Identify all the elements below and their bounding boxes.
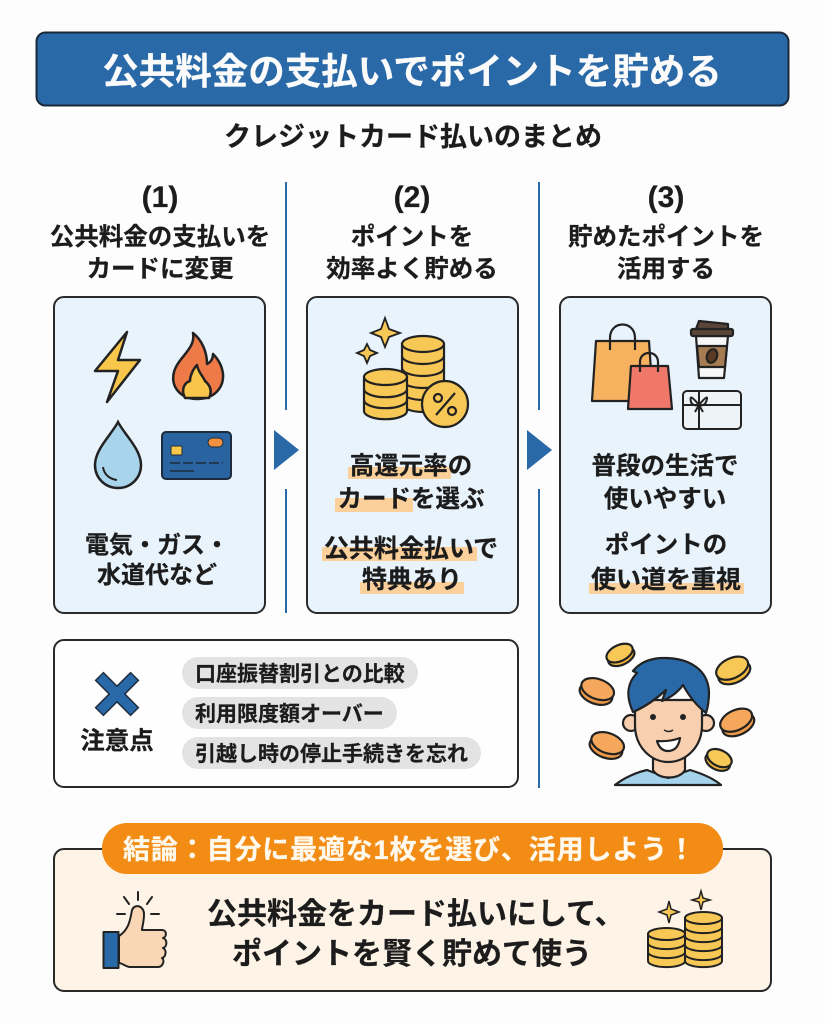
text: choose card: カードを選ぶ [338,485,484,513]
illustration: happy person with coins [577,640,758,785]
text: benefits: 特典あり [362,566,462,594]
heading: step 3: 活用する [617,255,715,283]
text: bills [85,532,229,589]
coin [587,728,627,763]
shirt [615,770,721,785]
heading: step 1: 公共料金の支払いを [50,223,270,251]
conclusion heading pill: 結論：自分に最適な1枚を選び、活用しよう！ [123,835,695,865]
text: bills: 水道代など [97,562,217,589]
icon: credit card [162,432,231,479]
coin [713,652,754,689]
panel: cautions [54,640,518,787]
hair [628,658,709,713]
panel: conclusion [54,823,771,991]
icon: coffee cup [691,321,733,378]
heading: step 1: (1) [142,181,178,214]
icon: water drop [95,422,141,488]
panel: use points [560,297,771,613]
text: bills: 電気・ガス・ [85,532,229,559]
panel: utility bills [54,297,265,613]
arrow 1 [274,430,299,470]
icon: lightning bolt [95,332,140,402]
text: conclusion message: 公共料金をカード払いにして、 [207,898,625,931]
heading: step 3: 貯めたポイントを [568,223,764,251]
mouth [657,738,680,751]
caution 2 [182,697,397,729]
panel: earn points [307,297,518,613]
text: easy to use: 普段の生活で [592,452,738,480]
text: how to spend [591,531,741,594]
heading: step 2: ポイントを [351,223,473,251]
caution 2: 利用限度額オーバー [195,703,384,726]
caution 3 [182,737,481,769]
title banner: 公共料金の支払いでポイントを貯める [102,51,722,92]
heading: step 1: カードに変更 [86,255,234,283]
icon: coin stacks with sparkles [648,891,722,967]
coin [577,674,617,709]
face [635,700,702,762]
caution 3: 引越し時の停止手続きを忘れ [195,743,468,766]
nose [664,730,673,732]
text: easy to use: 使いやすい [604,485,726,513]
text: conclusion message: ポイントを賢く貯めて使う [232,938,592,971]
text: how to spend: 使い道を重視 [591,566,741,594]
ears [623,715,639,731]
caution 1: 口座振替割引との比較 [195,663,405,686]
icon: shopping bags [592,324,672,409]
heading: step 3 [568,181,764,283]
eyes [650,714,686,720]
caution 1 [182,657,418,689]
cross mark fill [100,677,134,711]
heading: step 2: (2) [394,181,430,214]
column divider 2 [538,182,540,788]
heading: step 2: 効率よく貯める [326,255,498,283]
subtitle: クレジットカード払いのまとめ [224,122,602,152]
heading: step 1 [50,181,270,283]
highlights [322,467,477,594]
text: choose card: 高還元率の [350,452,472,480]
text: benefits: 公共料金払いで [324,535,498,563]
heading: step 2 [326,181,498,283]
label: cautions: 注意点 [80,727,154,755]
icon: gift card [683,391,741,429]
icon: cross mark [99,676,135,712]
icon: coin stacks with percent [357,318,468,427]
conclusion heading pill [102,823,723,874]
coin [604,640,637,670]
heading: step 3: (3) [648,181,684,214]
text: choose card [338,452,484,513]
icon: gas flame [173,333,223,399]
text: easy to use [592,452,738,513]
text: how to spend: ポイントの [605,531,727,559]
coin [703,745,735,774]
column divider 1 [285,182,287,613]
icon: thumbs up [104,892,166,968]
highlight [589,583,744,594]
title banner [36,32,788,106]
neck [653,755,685,778]
ear [698,715,714,731]
coin [717,704,758,741]
text: benefits [324,535,498,594]
arrow 2 [527,430,552,470]
text: conclusion message [207,898,625,971]
